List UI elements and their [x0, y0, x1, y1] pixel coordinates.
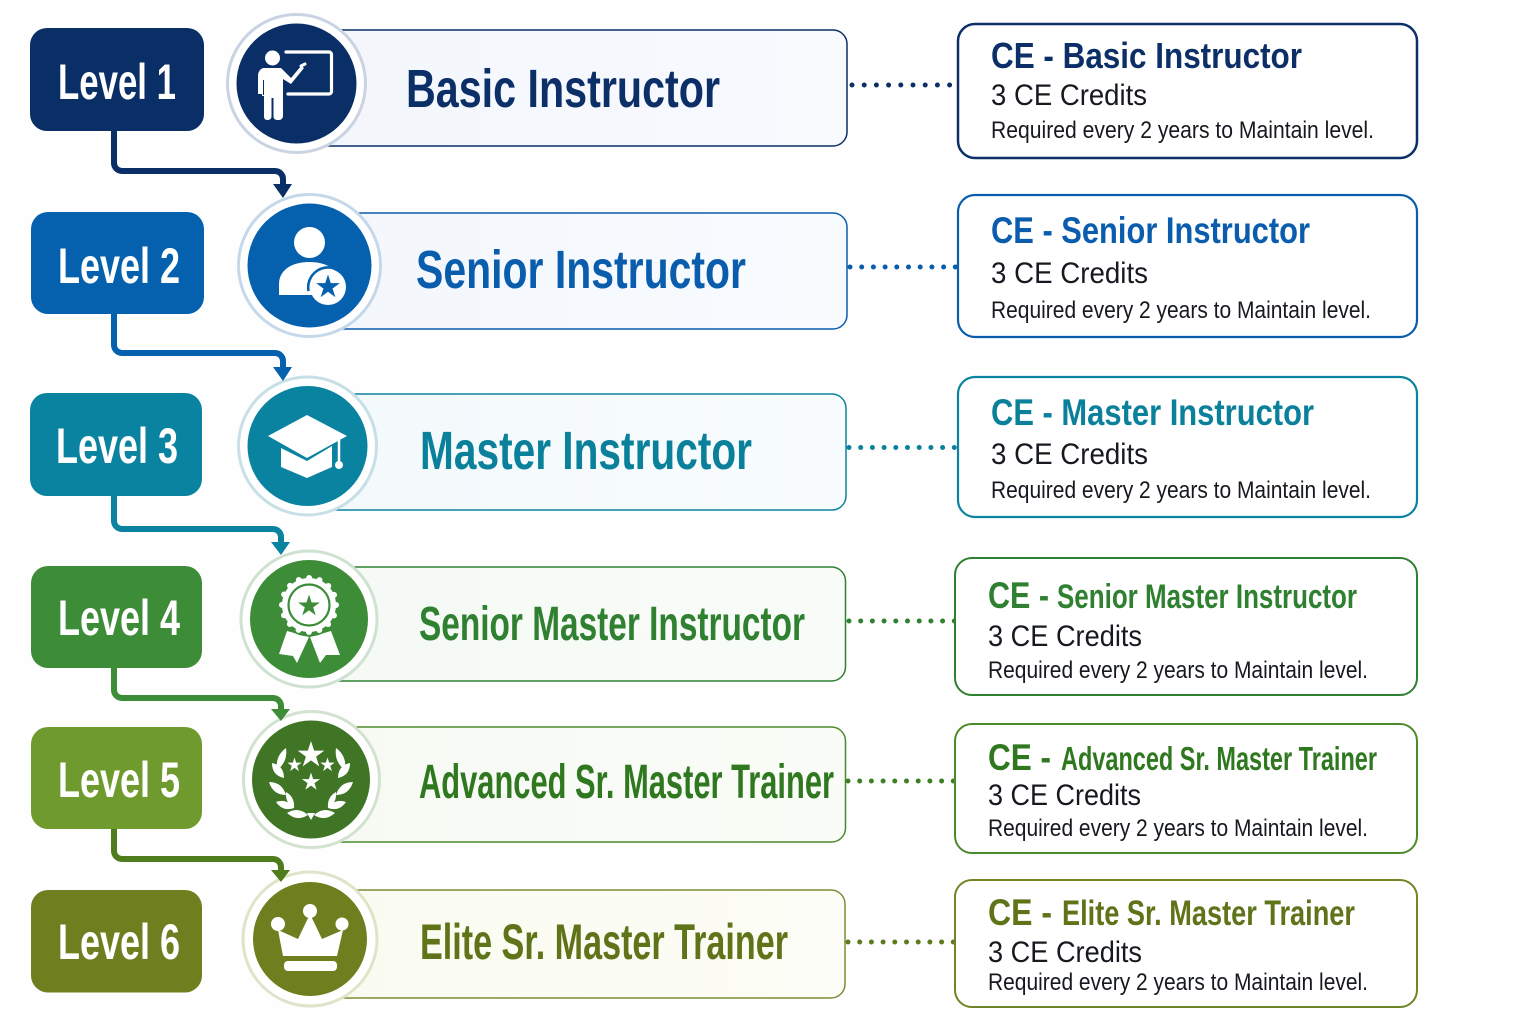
card: CE Basic Instructor: CE - Basic Instructor [991, 35, 1302, 76]
badge: level 6 [31, 890, 202, 992]
panel: Senior Master Instructor title bar [320, 567, 846, 681]
connector dots: level 5 [848, 778, 955, 784]
card: CE Master Instructor [958, 377, 1417, 517]
row: level 1 [30, 14, 1417, 158]
card: CE Senior Instructor: Required every 2 years to Maintain level. [991, 297, 1371, 324]
card: CE Senior Master Instructor: Senior Master Instructor [1057, 578, 1357, 616]
badge: level 3 [30, 393, 202, 496]
row: level 5 [31, 712, 1417, 853]
card: CE Senior Master Instructor: CE - [988, 575, 1049, 616]
icon: stars and laurel [244, 712, 380, 848]
arrow: level 2 to level 3 [114, 314, 292, 381]
card: CE Basic Instructor: Required every 2 years to Maintain level. [991, 117, 1374, 144]
connector dots: level 4 [849, 618, 955, 624]
arrow: level 3 to level 4 [114, 496, 290, 555]
card: CE Elite Sr. Master Trainer: Elite Sr. Master Trainer [1062, 894, 1355, 933]
panel: Basic Instructor title bar: Basic Instructor [406, 59, 720, 119]
badge: level 1: Level 1 [58, 54, 176, 110]
panel: Senior Instructor title bar: Senior Instructor [416, 240, 746, 300]
badge: level 2 [31, 212, 204, 314]
icon: crown [243, 872, 377, 1006]
card: CE Advanced Sr. Master Trainer: 3 CE Credits [988, 779, 1141, 812]
panel: Senior Master Instructor title bar: Senior Master Instructor [419, 598, 805, 651]
card: CE Senior Instructor: 3 CE Credits [991, 257, 1148, 290]
arrow: level 5 to level 6 [114, 829, 290, 882]
badge: level 6: Level 6 [58, 914, 180, 970]
badge: level 1 [30, 28, 204, 131]
panel: Senior Instructor title bar [320, 213, 847, 329]
card: CE Basic Instructor [958, 24, 1417, 158]
panel: Elite Sr. Master Trainer title bar [320, 890, 845, 998]
card: CE Senior Master Instructor: Required every 2 years to Maintain level. [988, 657, 1368, 684]
row: level 3 [30, 377, 1417, 517]
badge: level 5: Level 5 [58, 752, 180, 808]
panel: Advanced Sr. Master Trainer title bar [320, 727, 846, 842]
card: CE Elite Sr. Master Trainer: CE - [988, 892, 1052, 933]
arrow: level 1 to level 2 [114, 131, 292, 198]
connector dots: level 2 [850, 264, 957, 270]
card: CE Advanced Sr. Master Trainer [955, 724, 1417, 853]
panel: Elite Sr. Master Trainer title bar: Elite Sr. Master Trainer [420, 914, 788, 970]
row: level 4 [31, 551, 1417, 695]
card: CE Elite Sr. Master Trainer: 3 CE Credits [988, 936, 1142, 969]
card: CE Master Instructor: CE - Master Instructor [991, 392, 1314, 433]
panel: Master Instructor title bar [320, 394, 846, 510]
card: CE Master Instructor: 3 CE Credits [991, 438, 1148, 471]
connector dots: level 6 [848, 940, 955, 944]
panel: Master Instructor title bar: Master Instructor [420, 421, 752, 481]
card: CE Senior Instructor: CE - Senior Instructor [991, 210, 1310, 251]
panel: Basic Instructor title bar [310, 30, 847, 146]
card: CE Advanced Sr. Master Trainer: CE - [988, 737, 1051, 778]
row: level 6 [31, 872, 1417, 1007]
panel: Advanced Sr. Master Trainer title bar: Advanced Sr. Master Trainer [419, 756, 834, 809]
card: CE Advanced Sr. Master Trainer: Required every 2 years to Maintain level. [988, 815, 1368, 842]
arrow: level 4 to level 5 [114, 668, 290, 721]
connector dots: level 1 [852, 82, 956, 88]
connector dots: level 3 [849, 445, 957, 450]
card: CE Elite Sr. Master Trainer [955, 880, 1417, 1007]
card: CE Basic Instructor: 3 CE Credits [991, 79, 1147, 112]
card: CE Advanced Sr. Master Trainer: Advanced Sr. Master Trainer [1061, 740, 1377, 777]
card: CE Senior Master Instructor [955, 558, 1417, 695]
card: CE Master Instructor: Required every 2 years to Maintain level. [991, 477, 1371, 504]
card: CE Senior Instructor [958, 195, 1417, 337]
badge: level 4: Level 4 [58, 590, 180, 646]
row: level 2 [31, 194, 1417, 337]
icon: person with star [238, 194, 380, 336]
icon: award rosette [241, 551, 377, 687]
badge: level 3: Level 3 [56, 418, 178, 474]
icon: teacher at board [228, 14, 366, 152]
icon: graduation cap [238, 377, 376, 515]
badge: level 4 [31, 566, 202, 668]
badge: level 5 [31, 727, 202, 829]
card: CE Senior Master Instructor: 3 CE Credits [988, 620, 1142, 653]
card: CE Elite Sr. Master Trainer: Required every 2 years to Maintain level. [988, 969, 1368, 996]
badge: level 2: Level 2 [58, 238, 180, 294]
